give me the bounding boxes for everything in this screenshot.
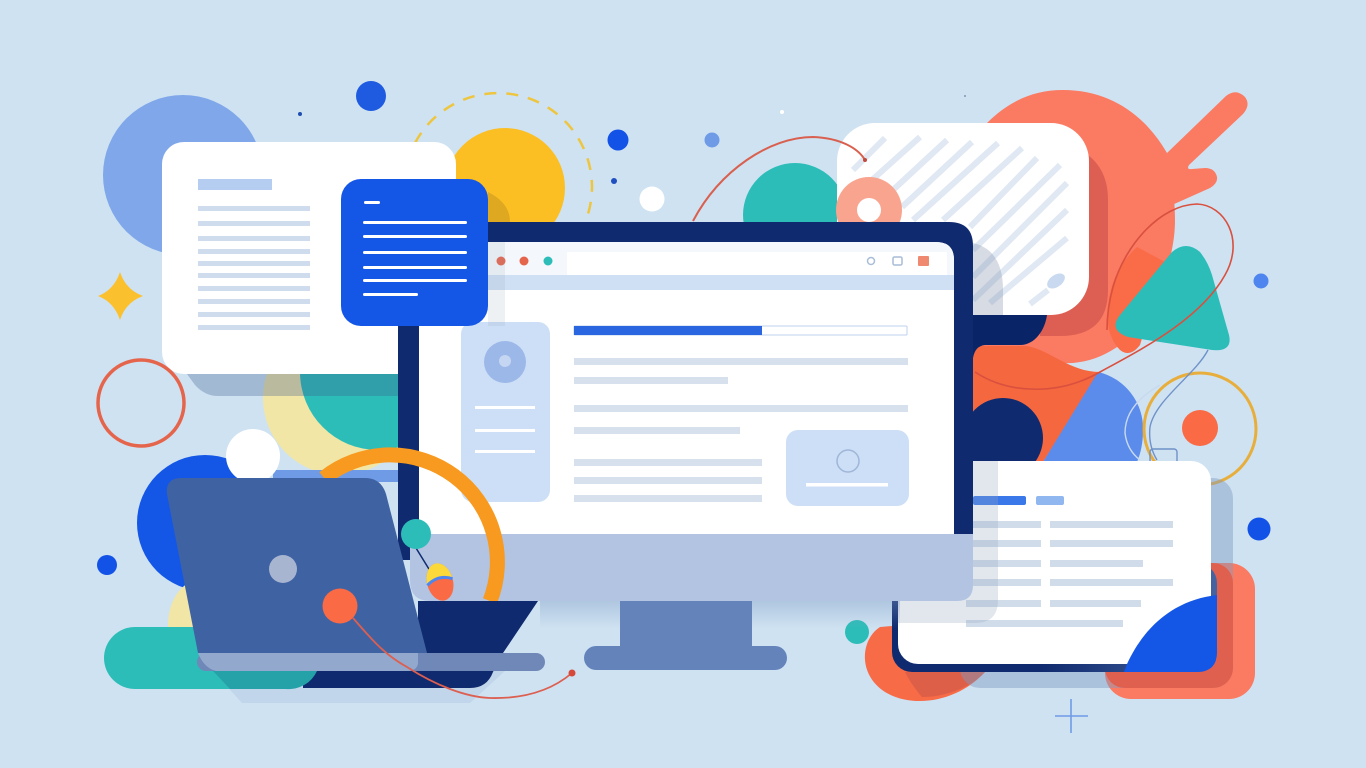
darker orange patch beside triangle [1108,247,1165,353]
content lines [574,358,908,502]
dashed arc [415,93,592,214]
coral blob with arm [973,90,1175,363]
background shapes: right cluster [845,90,1270,733]
orange wave region [973,346,1100,462]
ring and curve on striped card [693,137,902,243]
panel: document card bottom right [892,461,1233,688]
laptop screen [167,478,427,653]
monitor chin [410,534,973,601]
striped card shadow on blob [1040,150,1108,336]
monitor shadow on card [898,461,998,623]
sidebar [461,322,550,502]
coral blob bottom [865,620,985,701]
monitor stand [584,601,787,670]
image placeholder [786,430,909,506]
laptop base [303,601,538,688]
icon: plus [1055,699,1088,733]
monitor [398,222,973,670]
laptop [167,455,575,703]
browser window [419,242,954,534]
nodes and connector [322,519,576,698]
orange arc [324,455,497,601]
icon: star [98,272,143,320]
teal semicircle behind monitor [743,163,847,267]
blue blob [1043,372,1143,462]
teal triangle [1116,246,1230,350]
navy bar [973,315,1047,358]
panel: document card left [162,142,456,396]
blue corner [1124,595,1217,672]
laptop shadow [213,671,505,703]
progress bar [574,326,907,335]
background shapes: left cluster [97,81,966,689]
monitor frame [398,222,973,560]
thin red loop [975,204,1233,389]
panel: striped card top right [837,123,1089,315]
teal pill shadow [213,671,317,689]
panel: blue note card [341,179,510,326]
yellow ring [1144,373,1256,485]
navy circle [963,398,1043,478]
laptop deck [197,653,545,671]
coral box [1105,563,1255,699]
